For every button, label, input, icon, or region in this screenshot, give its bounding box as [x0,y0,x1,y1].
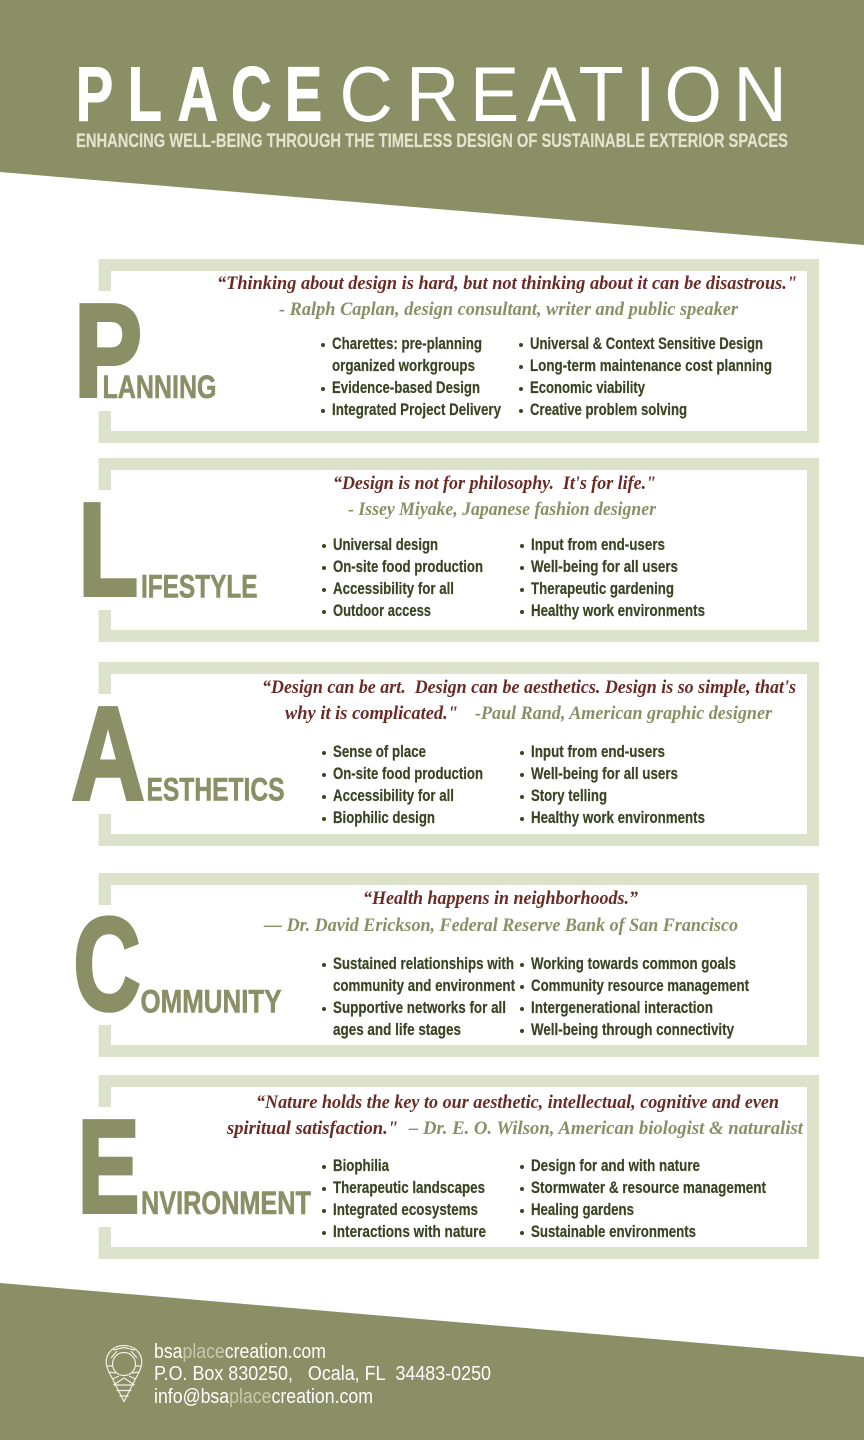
planning quote: “Thinking about design is hard, but not thinking about it can be disastrous." [217,274,797,294]
lifestyle quote: - Issey Miyake, Japanese fashion designer [348,500,657,520]
planning quote [217,274,797,320]
lifestyle heading [78,476,258,623]
community list: Community resource management [531,977,749,995]
aesthetics list: Biophilic design [333,809,435,827]
environment quote: “Nature holds the key to our aesthetic, intellectual, cognitive and even [256,1093,779,1113]
planning list: Evidence-based Design [332,379,480,397]
environment heading: NVIRONMENT [141,1185,311,1221]
title [76,51,787,138]
lifestyle list: Accessibility for all [333,580,454,598]
environment list: Stormwater & resource management [531,1179,766,1197]
aesthetics quote: “Design can be art. Design can be aesthetics. Design is so simple, that's [262,678,796,698]
community list: Working towards common goals [531,955,736,973]
aesthetics list: Story telling [531,787,607,805]
environment list: Healing gardens [531,1201,634,1219]
aesthetics quote: -Paul Rand, American graphic designer [475,704,773,724]
environment list: Integrated ecosystems [333,1201,478,1219]
environment heading: E [78,1093,139,1240]
aesthetics list [322,743,705,827]
header banner [0,0,864,245]
lifestyle quote [333,474,657,520]
aesthetics list: Accessibility for all [333,787,454,805]
planning heading [74,277,216,424]
community list: Sustained relationships with [333,955,514,973]
planning list: Integrated Project Delivery [332,401,502,419]
panel: aesthetics [72,662,819,846]
planning list: organized workgroups [332,357,475,375]
aesthetics frame [98,662,819,846]
planning list [321,335,772,419]
aesthetics quote: why it is complicated." [285,704,458,724]
lifestyle heading: IFESTYLE [141,568,258,604]
panel: environment [78,1075,819,1259]
planning frame [98,259,819,443]
lifestyle heading: L [78,476,138,623]
community heading: OMMUNITY [140,984,282,1020]
planning heading: LANNING [102,369,216,405]
contact text [154,1340,491,1408]
community list [322,955,749,1039]
community heading [74,890,282,1038]
planning list: Universal & Context Sensitive Design [530,335,763,353]
lifestyle list [322,536,705,620]
panel: lifestyle [78,458,819,642]
lifestyle list: Healthy work environments [531,602,705,620]
community heading: C [74,890,140,1038]
lifestyle list: Therapeutic gardening [531,580,674,598]
planning list: Long-term maintenance cost planning [530,357,772,375]
planning list: Creative problem solving [530,401,687,419]
lifestyle frame [98,458,819,642]
environment list: Design for and with nature [531,1157,700,1175]
environment heading [78,1093,311,1240]
aesthetics heading: A [72,680,144,827]
environment list: Sustainable environments [531,1223,696,1241]
environment list [322,1157,766,1241]
lifestyle quote: “Design is not for philosophy. It's for life." [333,474,656,494]
lifestyle list: Input from end-users [531,536,665,554]
aesthetics list: Sense of place [333,743,426,761]
community list: Well-being through connectivity [531,1021,735,1039]
aesthetics list: Healthy work environments [531,809,705,827]
community list: Intergenerational interaction [531,999,713,1017]
community list: ages and life stages [333,1021,461,1039]
lifestyle list: Universal design [333,536,438,554]
title: PLACE [76,52,322,138]
contact text: P.O. Box 830250, Ocala, FL 34483-0250 [154,1362,491,1385]
community quote: — Dr. David Erickson, Federal Reserve Bank of San Francisco [263,916,738,936]
planning quote: - Ralph Caplan, design consultant, writer and public speaker [279,300,739,320]
lifestyle list: Well-being for all users [531,558,678,576]
aesthetics list: Well-being for all users [531,765,678,783]
planning heading: P [74,277,142,424]
community list: community and environment [333,977,515,995]
planning list: Charettes: pre-planning [332,335,482,353]
footer banner [0,1283,864,1440]
environment quote: spiritual satisfaction." [226,1119,398,1139]
community frame [98,873,819,1057]
icon: map pin [106,1346,142,1402]
environment frame [98,1075,819,1259]
panel: planning [74,259,819,443]
environment list: Biophilia [333,1157,390,1175]
environment list: Interactions with nature [333,1223,486,1241]
aesthetics quote [262,678,796,724]
panel: community [74,873,819,1057]
community quote: “Health happens in neighborhoods.” [363,889,638,909]
contact text: bsaplacecreation.com [154,1340,326,1363]
aesthetics heading [72,680,284,827]
community list: Supportive networks for all [333,999,506,1017]
lifestyle list: On-site food production [333,558,483,576]
aesthetics heading: ESTHETICS [146,772,284,808]
environment list: Therapeutic landscapes [333,1179,485,1197]
contact text: info@bsaplacecreation.com [154,1385,373,1408]
environment quote [226,1093,804,1139]
aesthetics list: On-site food production [333,765,483,783]
community quote [263,889,738,936]
environment quote: – Dr. E. O. Wilson, American biologist & naturalist [408,1119,804,1139]
aesthetics list: Input from end-users [531,743,665,761]
lifestyle list: Outdoor access [333,602,431,620]
planning list: Economic viability [530,379,646,397]
title: CREATION [339,51,787,138]
